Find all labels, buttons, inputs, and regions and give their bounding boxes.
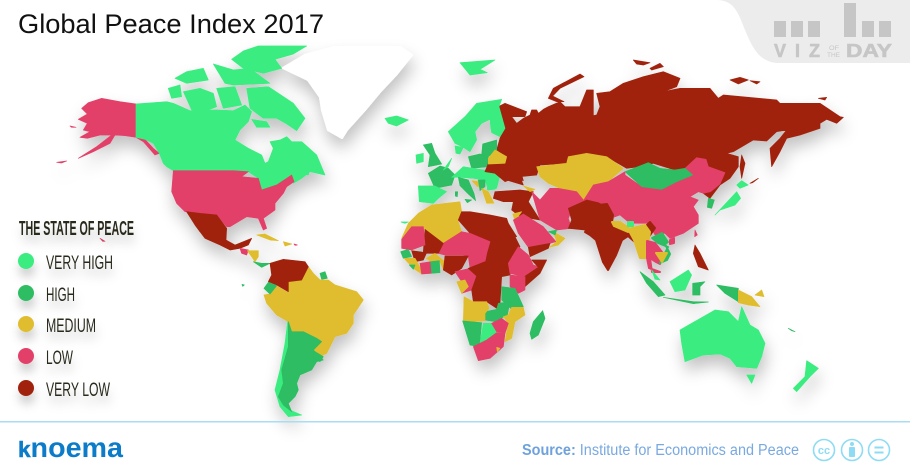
footer rule <box>0 421 910 422</box>
logo: viz of the day: DAY <box>846 41 892 61</box>
logo: viz of the day <box>718 0 910 63</box>
region: South Asia and Indochina <box>585 204 674 272</box>
logo: knoema: knoema <box>18 432 123 463</box>
legend item: high: HIGH <box>46 285 75 306</box>
legend item: very high: VERY HIGH <box>46 253 113 274</box>
legend item: low <box>18 348 73 369</box>
region: Eurasia <box>385 60 843 238</box>
legend item: high <box>18 285 75 306</box>
region: Greenland <box>283 47 412 138</box>
region: Africa and Arabia <box>401 202 565 361</box>
logo: viz of the day: OF <box>829 45 839 52</box>
source text: Source: Institute for Economics and Peace <box>522 442 799 459</box>
region: Oceania and Southeast Asia <box>640 245 818 392</box>
legend item: very high <box>18 253 113 274</box>
legend item: low: LOW <box>46 348 73 369</box>
logo: viz of the day: VIZ <box>774 41 820 61</box>
legend item: medium: MEDIUM <box>46 316 96 337</box>
legend <box>18 218 134 401</box>
legend item: very low: VERY LOW <box>46 380 110 401</box>
region: Mexico and Latin America <box>187 212 363 417</box>
icons: creative commons <box>814 440 890 460</box>
logo: viz of the day: THE <box>827 52 841 59</box>
world map <box>57 46 843 417</box>
legend heading: THE STATE OF PEACE <box>19 218 134 240</box>
legend item: very low <box>18 380 110 401</box>
legend item: medium <box>18 316 96 337</box>
icons: creative commons: cc <box>818 445 830 457</box>
title: Global Peace Index 2017 <box>18 9 324 39</box>
region: North America <box>57 46 325 241</box>
